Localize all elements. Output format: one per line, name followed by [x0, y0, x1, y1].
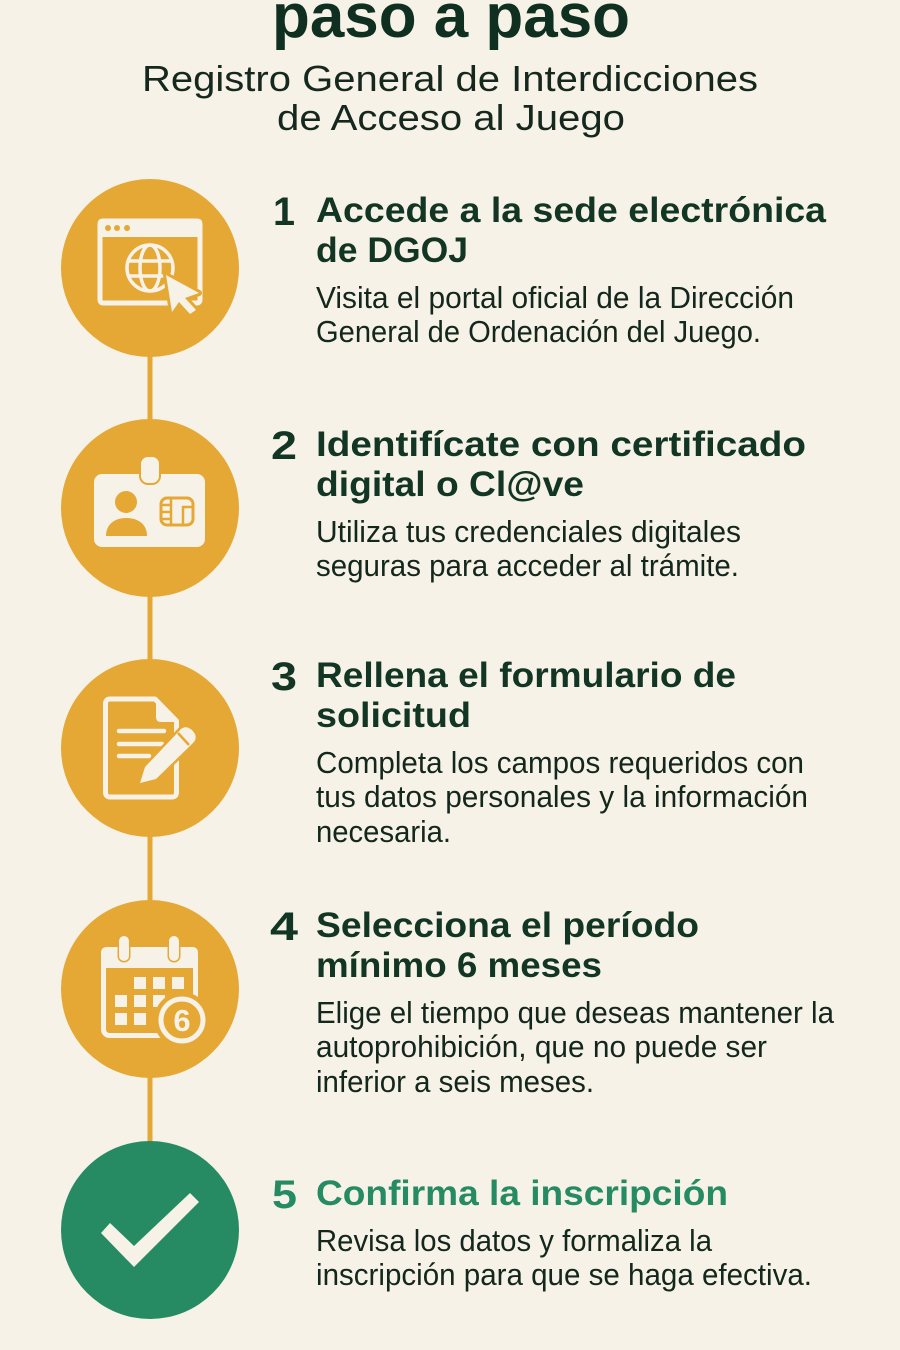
timeline connector [148, 268, 152, 1230]
step 2 number: 2 [271, 424, 297, 468]
step 2 heading [316, 425, 806, 504]
step 3 description: necesaria. [316, 814, 451, 849]
step 1 description [316, 280, 794, 349]
subtitle [142, 58, 758, 138]
step 2 description [316, 514, 741, 583]
step 4 heading: Selecciona el período [316, 906, 699, 945]
step 1 heading [316, 191, 827, 270]
step 4 icon: calendar with six badge: 6 [173, 1003, 191, 1038]
step 2 heading: Identifícate con certificado [316, 425, 806, 464]
step 4 description: autoprohibición, que no puede ser [316, 1029, 767, 1064]
step 1 icon: browser with globe and cursor [61, 179, 239, 357]
step 3 description: tus datos personales y la información [316, 779, 808, 814]
step 4 heading [316, 906, 699, 985]
step 3 heading [316, 656, 736, 735]
step 3 heading: Rellena el formulario de [316, 656, 736, 695]
step 5 description [316, 1223, 812, 1292]
step 4 description: Elige el tiempo que deseas mantener la [316, 995, 835, 1030]
step 1 description: Visita el portal oficial de la Dirección [316, 280, 794, 315]
step 5 number: 5 [272, 1173, 297, 1217]
step 2 icon: ID card [61, 419, 239, 597]
step 5 description: inscripción para que se haga efectiva. [316, 1257, 812, 1292]
step 3 heading: solicitud [316, 696, 471, 735]
step 2 heading: digital o Cl@ve [316, 465, 584, 504]
step 1 heading: de DGOJ [316, 231, 468, 270]
step 4 number: 4 [270, 905, 299, 949]
subtitle: de Acceso al Juego [277, 97, 625, 138]
step 2 description: seguras para acceder al trámite. [316, 548, 739, 583]
step 3 icon: document and pencil [61, 659, 239, 837]
step 5 description: Revisa los datos y formaliza la [316, 1223, 713, 1258]
step 2 description: Utiliza tus credenciales digitales [316, 514, 741, 549]
step 3 number: 3 [271, 655, 297, 699]
step 1 description: General de Ordenación del Juego. [316, 314, 761, 349]
step 4 icon: calendar with six badge [61, 900, 239, 1078]
step 1 heading: Accede a la sede electrónica [316, 191, 827, 230]
step 4 description [316, 995, 835, 1099]
step 4 description: inferior a seis meses. [316, 1064, 594, 1099]
subtitle: Registro General de Interdicciones [142, 58, 758, 99]
step 5 heading: Confirma la inscripción [316, 1174, 728, 1213]
step 4 heading: mínimo 6 meses [316, 946, 602, 985]
step 3 description [316, 745, 808, 849]
step 3 description: Completa los campos requeridos con [316, 745, 804, 780]
step 1 number: 1 [273, 190, 295, 234]
step 5 icon: check mark [61, 1141, 239, 1319]
